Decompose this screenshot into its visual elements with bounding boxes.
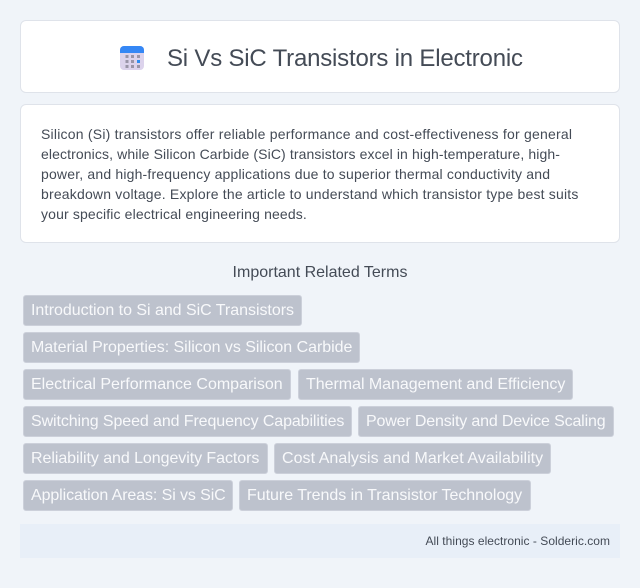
tag: Electrical Performance Comparison xyxy=(31,376,283,393)
footer text: All things electronic - Solderic.com xyxy=(426,534,610,548)
tag: Power Density and Device Scaling xyxy=(366,413,605,430)
tag xyxy=(23,369,291,400)
tag xyxy=(298,369,573,400)
tag xyxy=(358,406,614,437)
tag: Thermal Management and Efficiency xyxy=(306,376,565,393)
title: Si Vs SiC Transistors in Electronic xyxy=(167,45,523,72)
tag: Introduction to Si and SiC Transistors xyxy=(31,302,294,319)
intro text xyxy=(41,126,579,222)
tag xyxy=(239,480,531,511)
tag xyxy=(23,480,233,511)
tag xyxy=(23,443,268,474)
intro text: power, and high-frequency applications due to superior thermal conductivity and xyxy=(41,166,550,182)
intro text panel xyxy=(20,104,620,243)
intro text: electronics, while Silicon Carbide (SiC) transistors excel in high-temperature, high- xyxy=(41,146,560,162)
tag list xyxy=(23,295,614,511)
tag xyxy=(23,406,352,437)
tag: Switching Speed and Frequency Capabilities xyxy=(31,413,344,430)
tag xyxy=(23,332,360,363)
intro text: Silicon (Si) transistors offer reliable performance and cost-effectiveness for general xyxy=(41,126,572,142)
header panel xyxy=(20,20,620,93)
icon: calendar xyxy=(120,46,144,70)
tag: Reliability and Longevity Factors xyxy=(31,450,259,467)
footer bar xyxy=(20,524,620,558)
tag: Material Properties: Silicon vs Silicon Carbide xyxy=(31,339,352,356)
tag: Future Trends in Transistor Technology xyxy=(247,487,522,504)
intro text: your specific electrical engineering needs. xyxy=(41,206,307,222)
tag xyxy=(274,443,551,474)
tag: Application Areas: Si vs SiC xyxy=(31,487,226,504)
tag xyxy=(23,295,302,326)
section heading: Important Related Terms xyxy=(233,264,407,281)
tag: Cost Analysis and Market Availability xyxy=(282,450,543,467)
intro text: breakdown voltage. Explore the article to understand which transistor type best suits xyxy=(41,186,579,202)
